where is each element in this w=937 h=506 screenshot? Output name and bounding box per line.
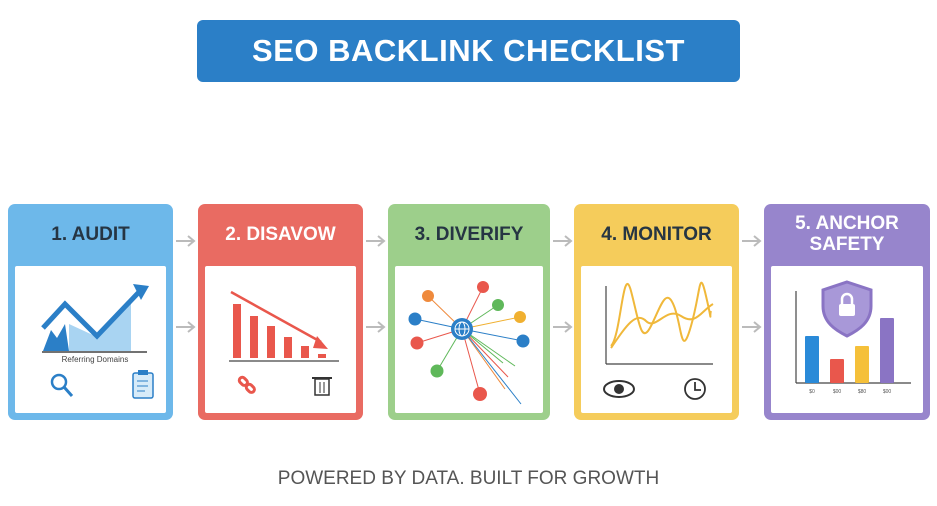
chart: anchor bars with shield: $0 [809,389,815,395]
chart: anchor bars with shield: $00 [833,389,841,395]
title: SEO BACKLINK CHECKLIST [252,33,685,68]
arrow 3-4 top [553,235,572,247]
heading: monitor: 4. MONITOR [601,224,712,244]
chart: anchor bars with shield [771,266,923,413]
chart: monitoring lines [581,266,732,413]
heading: audit: 1. AUDIT [51,224,130,244]
heading: anchor safety: SAFETY [810,234,884,255]
panel: diversify [388,204,550,420]
panel: disavow [198,204,363,420]
arrow 1-2 top [176,235,196,247]
arrow 4-5 bottom [742,321,762,333]
heading: disavow: 2. DISAVOW [225,224,336,244]
panel: anchor safety [764,204,930,420]
chart: anchor bars with shield: $00 [883,389,891,395]
panel: audit [8,204,173,420]
heading: diversify: 3. DIVERIFY [415,224,523,244]
panel: monitor [574,204,739,420]
chart: referring domains [15,266,166,413]
footer tagline: POWERED BY DATA. BUILT FOR GROWTH [278,468,659,489]
heading: anchor safety: 5. ANCHOR [795,213,899,234]
heading: anchor safety [795,213,899,255]
chart: referring domains: Referring Domains [62,355,128,364]
chart: declining bars [205,266,356,413]
chart: anchor bars with shield: $80 [858,389,866,395]
arrow 3-4 bottom [553,321,572,333]
diagram: link network [395,266,543,413]
arrow 4-5 top [742,235,762,247]
arrow 1-2 bottom [176,321,196,333]
arrow 2-3 bottom [366,321,386,333]
arrow 2-3 top [366,235,386,247]
title [197,20,740,82]
